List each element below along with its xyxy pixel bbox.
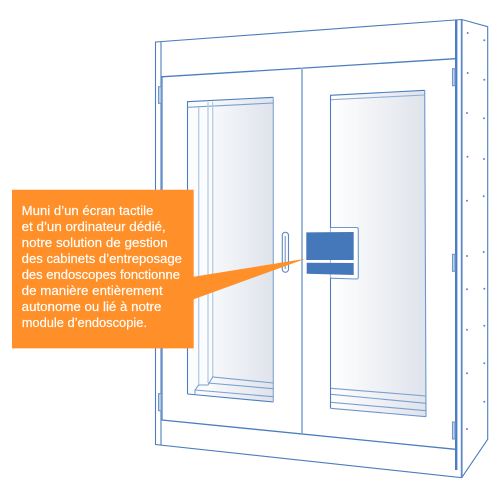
callout text: notre solution de gestion: [22, 235, 168, 250]
center door post: [301, 68, 303, 433]
callout text: [22, 203, 182, 330]
left window: [187, 97, 273, 402]
callout text: et d’un ordinateur dédié,: [22, 219, 166, 234]
callout box and pointer: [12, 190, 306, 348]
callout: [12, 190, 306, 348]
hinges: [158, 69, 455, 439]
cabinet outline: [156, 20, 488, 478]
callout text: autonome ou lié à notre: [22, 299, 161, 314]
callout text: des cabinets d’entreposage: [22, 251, 182, 266]
callout text: Muni d’un écran tactile: [22, 203, 153, 218]
callout text: de manière entièrement: [22, 283, 163, 298]
callout text: module d’endoscopie.: [22, 315, 147, 330]
right window: [330, 90, 426, 417]
door handle: [282, 232, 288, 272]
touch screen: [306, 232, 354, 275]
side panel screw dots: [466, 32, 485, 430]
screen housing: [330, 228, 358, 279]
cabinet: [156, 20, 488, 478]
callout text: des endoscopes fonctionne: [22, 267, 180, 282]
